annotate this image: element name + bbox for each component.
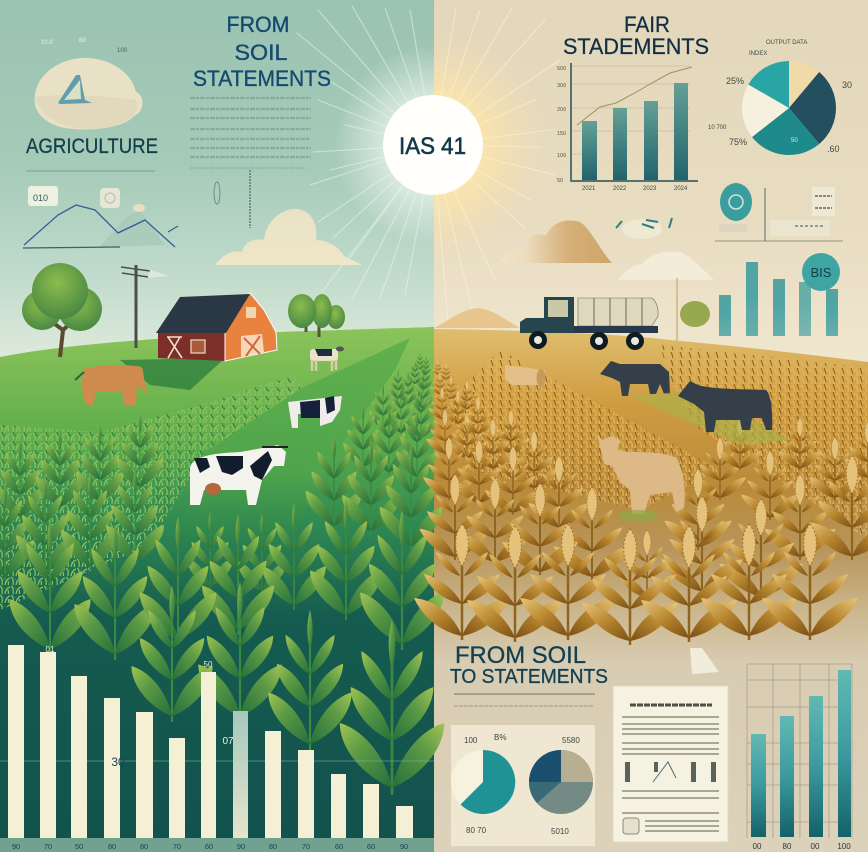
heading: from soil to statements: TO STATEMENTS xyxy=(450,666,608,688)
line chart: left mountains xyxy=(23,170,250,248)
bar chart: top right: 300 xyxy=(557,83,566,89)
bar chart: left bottom: 70 xyxy=(44,842,52,851)
bar chart: bottom right xyxy=(747,664,852,851)
cow: black near xyxy=(678,381,772,432)
divider line and caption xyxy=(454,694,595,706)
pie chart: top right: INDEX xyxy=(749,51,767,57)
background: golden sky, right half xyxy=(434,0,868,370)
pie chart: top right: 50 xyxy=(791,138,798,144)
heading: fair statements xyxy=(563,12,709,59)
heading: from soil to statements: FROM SOIL xyxy=(455,642,586,669)
bar chart: left bottom: 96 xyxy=(330,789,342,800)
heading: from soil statements xyxy=(193,12,331,91)
small labels above dome: 60 xyxy=(79,38,86,44)
pie chart: top right: OUTPUT DATA xyxy=(766,40,807,46)
line chart: left mountains: 010 xyxy=(33,193,48,203)
crop texture: left small plants xyxy=(0,375,302,610)
panel: twin pies: 5010 xyxy=(551,827,569,836)
bar chart: mid right teal xyxy=(719,262,838,336)
panel: twin pies: B% xyxy=(494,733,506,742)
bar chart: left bottom: 50 xyxy=(75,842,83,851)
bar chart: left bottom: 90 xyxy=(400,842,408,851)
bar chart: top right: 2023 xyxy=(643,186,657,192)
heading: from soil statements: SOIL xyxy=(234,40,288,65)
field: right gold xyxy=(434,329,868,852)
bar chart: top right: 100 xyxy=(557,153,566,159)
pole and lollipop tree, right xyxy=(677,278,710,344)
tag: paper corner xyxy=(690,648,719,674)
bar chart: left bottom: 90 xyxy=(12,842,20,851)
badge: teal value: BIS xyxy=(811,265,832,280)
icon: small floating animal xyxy=(616,218,672,239)
bar chart: left bottom: 01 xyxy=(46,645,55,654)
bar chart: top right: 2021 xyxy=(582,186,596,192)
bar chart: top right: 2024 xyxy=(674,186,688,192)
cow: large holstein xyxy=(190,445,288,505)
trees: small group xyxy=(288,294,345,337)
bar chart: left bottom: 30 xyxy=(111,755,125,769)
bar chart: top right: 2022 xyxy=(613,186,627,192)
small labels above dome: 100 xyxy=(117,48,128,54)
bar chart: top right: 50 xyxy=(557,178,563,184)
crop texture: right middle rows xyxy=(450,350,720,510)
bar chart: left bottom: 60 xyxy=(205,842,213,851)
pie chart: top right: 30 xyxy=(842,80,852,90)
bar chart: bottom right: 100 xyxy=(837,842,851,851)
small labels above dome xyxy=(41,38,128,54)
utility pole xyxy=(121,265,170,348)
bar chart: bottom right: 00 xyxy=(753,842,762,851)
bar chart: left bottom: 70 xyxy=(302,842,310,851)
bar chart: left bottom: 50 xyxy=(204,660,213,669)
panel: twin pies: 5580 xyxy=(562,736,580,745)
crop rows: right back xyxy=(419,360,868,565)
crop texture: right small plants xyxy=(660,345,868,540)
bar chart: left bottom: 60 xyxy=(335,842,343,851)
bar chart: left bottom: 80 xyxy=(269,842,277,851)
bar chart: top right: 200 xyxy=(557,107,566,113)
bar chart: bottom right: 80 xyxy=(783,842,792,851)
cow: black far xyxy=(600,361,670,396)
badge: teal value xyxy=(802,253,840,291)
field: left green xyxy=(0,327,434,852)
cow: middle xyxy=(288,396,342,428)
panel: twin pies: 80 70 xyxy=(466,826,487,835)
cloud: right tan xyxy=(499,221,612,263)
bar chart: left bottom xyxy=(0,645,434,852)
icon: agriculture dome xyxy=(35,58,143,130)
icon: teal badge and small diagram xyxy=(715,183,843,241)
bar chart: bottom right: 00 xyxy=(811,842,820,851)
sun disc with IAS 41 xyxy=(383,95,483,195)
bar chart: left bottom: 90 xyxy=(237,842,245,851)
crop rows: right mid behind tan cow xyxy=(502,483,803,600)
bar chart: left bottom: 80 xyxy=(108,842,116,851)
panel: twin pies xyxy=(451,725,595,846)
pie: dark xyxy=(529,750,593,814)
pie chart: top right xyxy=(708,40,852,155)
pie: teal xyxy=(451,750,515,814)
bar chart: top right: 150 xyxy=(557,131,566,137)
bar chart: top right: 500 xyxy=(557,66,566,72)
cow: orange xyxy=(75,365,148,406)
background: green sky, left half xyxy=(0,0,434,360)
barrel xyxy=(505,365,546,387)
small labels above dome: 10.0 xyxy=(41,40,53,46)
pie chart: top right: 75% xyxy=(729,137,747,147)
crop rows: right front xyxy=(414,524,858,645)
heading: from soil statements: FROM xyxy=(226,12,290,37)
grass patch under black cows xyxy=(630,390,790,445)
document: statement sheet xyxy=(613,686,728,842)
bar chart: left bottom: 60 xyxy=(367,842,375,851)
pie chart: top right: 10 700 xyxy=(708,125,727,131)
sun disc with IAS 41: IAS 41 xyxy=(399,133,466,160)
heading: agriculture: AGRICULTURE xyxy=(26,135,158,158)
sun glow xyxy=(320,20,554,270)
crop rows: left far rows xyxy=(0,352,442,580)
heading: from soil to statements xyxy=(450,642,608,688)
bar chart: top right xyxy=(557,63,698,192)
cow: tan xyxy=(597,434,685,522)
barn shadow xyxy=(120,358,225,390)
heading: from soil statements: STATEMENTS xyxy=(193,66,331,91)
barn xyxy=(156,293,277,361)
cloud: right small xyxy=(618,252,714,280)
heading: fair statements: STADEMENTS xyxy=(563,34,709,59)
crop rows: left near rows xyxy=(9,499,444,795)
cloud: left xyxy=(215,209,362,265)
sun rays xyxy=(297,6,560,320)
tree: large left xyxy=(22,263,102,357)
bar chart: left bottom: 80 xyxy=(140,842,148,851)
grass strip around cows xyxy=(175,338,410,545)
cloud: far horizon xyxy=(434,308,520,328)
pie chart: top right: 25% xyxy=(726,76,744,86)
text block: blurred body copy xyxy=(190,98,311,168)
truck xyxy=(520,297,658,350)
panel: twin pies: 100 xyxy=(464,736,478,745)
bar chart: left bottom: 07 xyxy=(222,736,234,747)
bar chart: left bottom: 70 xyxy=(173,842,181,851)
heading: fair statements: FAIR xyxy=(624,12,670,37)
cow: small far xyxy=(310,346,344,371)
pie chart: top right: .60 xyxy=(827,144,840,154)
